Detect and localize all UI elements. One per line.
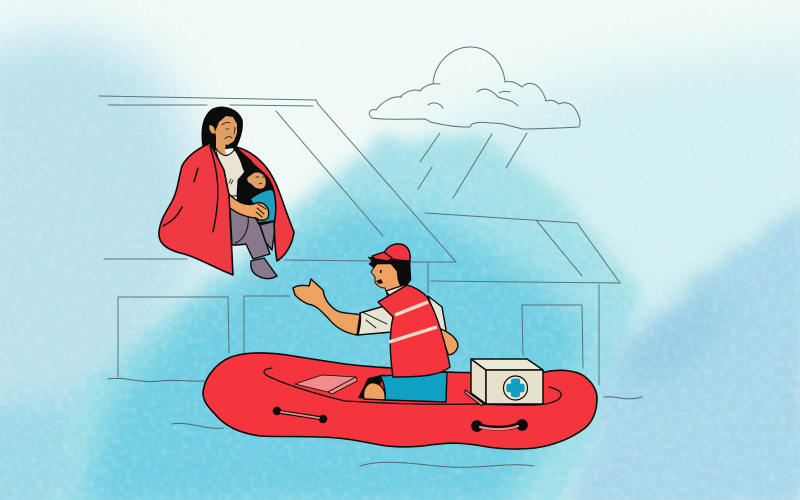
rescuer outstretched arm [293, 279, 360, 335]
woman face [215, 116, 237, 145]
woman hair [202, 107, 242, 150]
rescuer cap [384, 244, 410, 261]
blanket left [159, 143, 233, 275]
left handle [274, 408, 280, 414]
child facial features [256, 177, 264, 184]
woman legs [230, 207, 270, 259]
right handle [472, 421, 482, 431]
rescuer moustache and eye [376, 270, 383, 284]
woman shirt [215, 147, 245, 196]
rescuer shorts [380, 372, 447, 402]
line art: water ripples [108, 378, 642, 467]
boat inner rim [264, 368, 561, 405]
kit mat [465, 390, 483, 406]
line art: houses [99, 96, 620, 385]
child face [247, 172, 266, 189]
rubber boat [203, 353, 597, 449]
line art: rain [418, 133, 527, 198]
rescuer collar [386, 284, 410, 298]
rescuer knee backing [358, 374, 385, 400]
kit top [471, 359, 543, 370]
kit side [471, 359, 486, 404]
kit emblem [504, 376, 528, 400]
black backing behind child [234, 147, 276, 225]
boat hull [203, 353, 597, 449]
woman ear [209, 125, 215, 134]
woman fingers [256, 204, 266, 217]
blanket right [236, 147, 294, 261]
rescuer hair [368, 257, 411, 286]
woman neck [216, 136, 229, 157]
woman arm [229, 194, 269, 220]
rescuer vest [378, 285, 450, 377]
woman shoe [251, 258, 277, 279]
rescuer in red vest [293, 244, 458, 402]
vest stripes [395, 302, 428, 315]
blanket fold lines [163, 146, 218, 232]
child body [250, 190, 277, 223]
kit front [486, 370, 543, 404]
rescuer sleeve [358, 305, 393, 335]
rescuer back arm [428, 296, 446, 335]
rescuer neck and face [371, 262, 403, 298]
rescuer knee [364, 383, 385, 400]
child hair [243, 166, 269, 191]
first aid kit [465, 359, 543, 406]
woman facial features [222, 122, 236, 139]
shirt fold [229, 179, 233, 184]
sleeve fold lines [364, 313, 387, 328]
woman with child wrapped in blanket [159, 107, 294, 279]
boat folded mat [295, 375, 356, 392]
knee crease [235, 212, 248, 243]
line art: cloud and sun [369, 47, 580, 129]
